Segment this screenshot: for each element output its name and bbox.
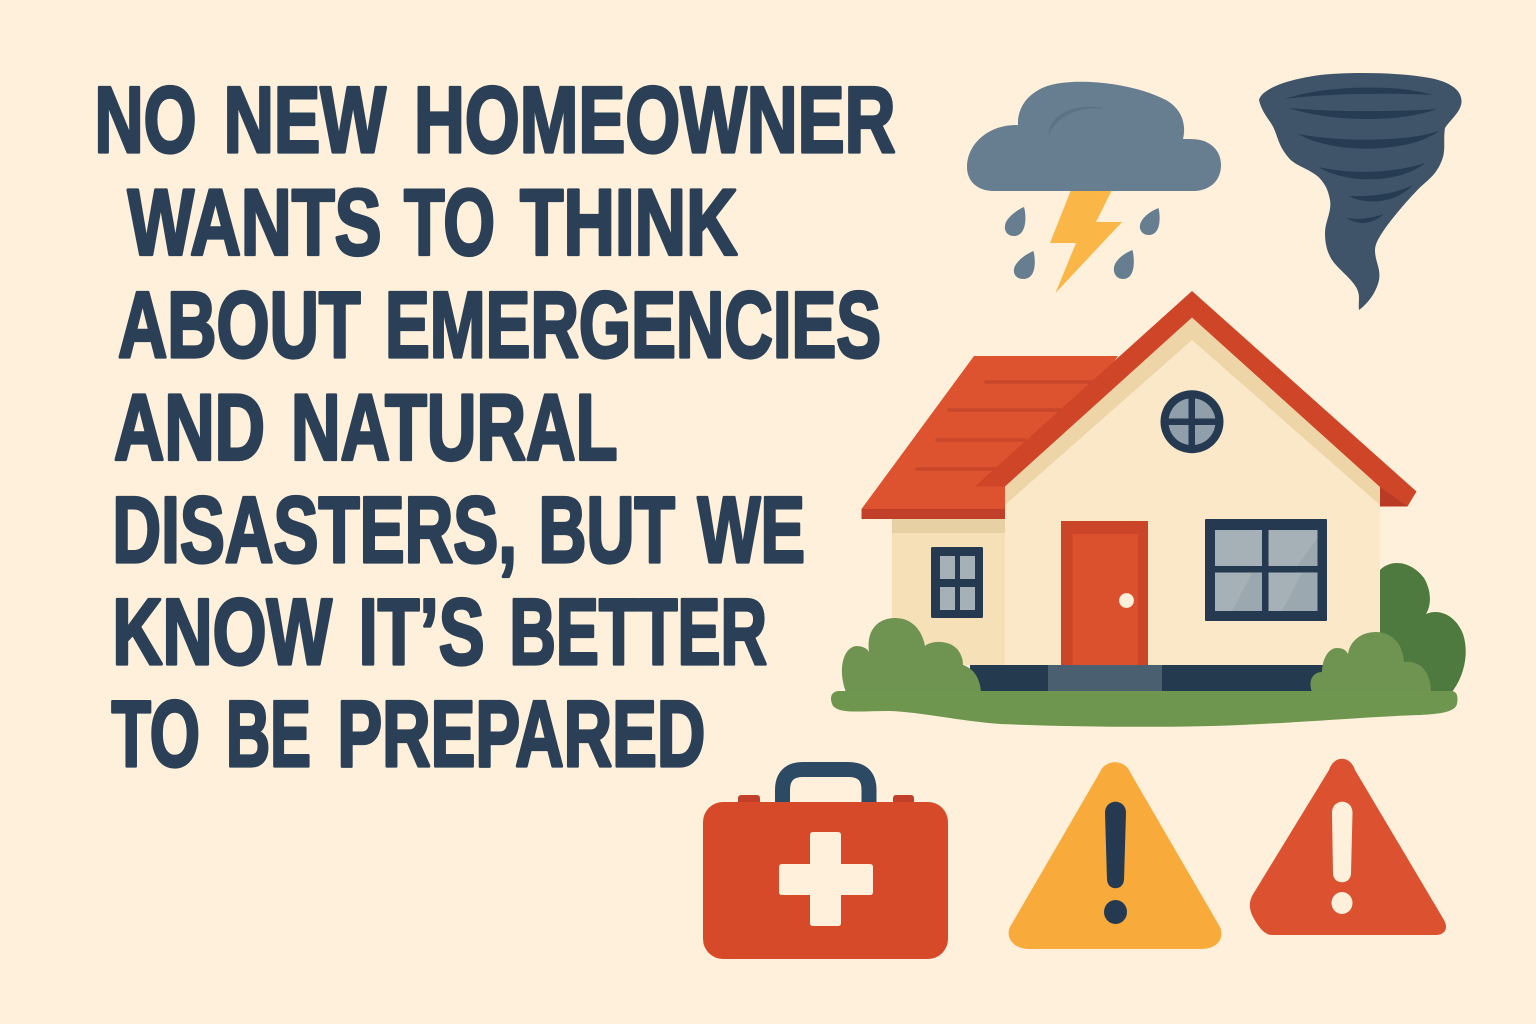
grass bbox=[831, 691, 1457, 727]
left roof bbox=[862, 356, 1118, 509]
title: ABOUT bbox=[118, 272, 360, 377]
title: DISASTERS, bbox=[112, 477, 517, 582]
kit body bbox=[703, 802, 948, 959]
rain drop bbox=[1140, 208, 1160, 235]
rain drop bbox=[1014, 251, 1035, 279]
title: BETTER bbox=[509, 579, 767, 684]
tornado bands bbox=[1285, 87, 1439, 223]
main roof bbox=[975, 291, 1416, 506]
lightning bolt bbox=[1050, 190, 1122, 293]
main wall bbox=[1005, 330, 1380, 665]
left eave bbox=[862, 509, 1005, 519]
title: WANTS bbox=[128, 170, 382, 274]
title: BE bbox=[226, 681, 311, 786]
title: NO bbox=[94, 67, 196, 172]
title: NEW bbox=[224, 67, 387, 172]
icon: red warning triangle bbox=[1250, 759, 1446, 935]
icon: tornado bbox=[1259, 73, 1462, 310]
kit clasps bbox=[738, 795, 914, 805]
icon: house bbox=[831, 291, 1466, 727]
title: TO bbox=[404, 170, 495, 274]
left bush bbox=[842, 618, 981, 692]
title: THINK bbox=[520, 170, 738, 274]
back bush bbox=[1380, 563, 1466, 692]
exclamation mark bbox=[1104, 802, 1127, 924]
title: NATURAL bbox=[291, 374, 618, 480]
exclamation mark bbox=[1332, 802, 1352, 914]
kit cross bbox=[779, 832, 873, 926]
icon: yellow warning triangle bbox=[1009, 762, 1221, 949]
roof gable shadow bbox=[1380, 487, 1408, 506]
rain drop bbox=[1005, 207, 1025, 236]
annex wall bbox=[892, 519, 1005, 665]
title: HOMEOWNER bbox=[414, 67, 896, 172]
soffit bbox=[1005, 317, 1380, 505]
title: IT’S bbox=[359, 579, 484, 684]
annex shadow bbox=[892, 519, 1005, 533]
front step bbox=[1048, 665, 1162, 692]
rain drop bbox=[1114, 250, 1134, 279]
round window bbox=[1160, 390, 1224, 453]
title: AND bbox=[114, 374, 265, 480]
door bbox=[1061, 521, 1148, 665]
icon: first aid kit bbox=[703, 770, 948, 959]
right bush bbox=[1310, 632, 1431, 692]
title: EMERGENCIES bbox=[385, 272, 881, 377]
small window bbox=[931, 547, 983, 618]
large window bbox=[1205, 519, 1327, 621]
title: TO bbox=[112, 681, 200, 786]
roof shingle lines bbox=[917, 382, 1093, 469]
foundation bbox=[970, 665, 1325, 692]
title: KNOW bbox=[112, 579, 333, 684]
title bbox=[94, 67, 896, 786]
icon: storm cloud with lightning and rain bbox=[967, 82, 1221, 293]
cloud bbox=[967, 82, 1221, 191]
kit handle bbox=[782, 770, 869, 803]
title: PREPARED bbox=[337, 681, 705, 786]
title: WE bbox=[698, 477, 805, 582]
cloud highlight bbox=[1049, 107, 1102, 134]
title: BUT bbox=[538, 477, 675, 582]
